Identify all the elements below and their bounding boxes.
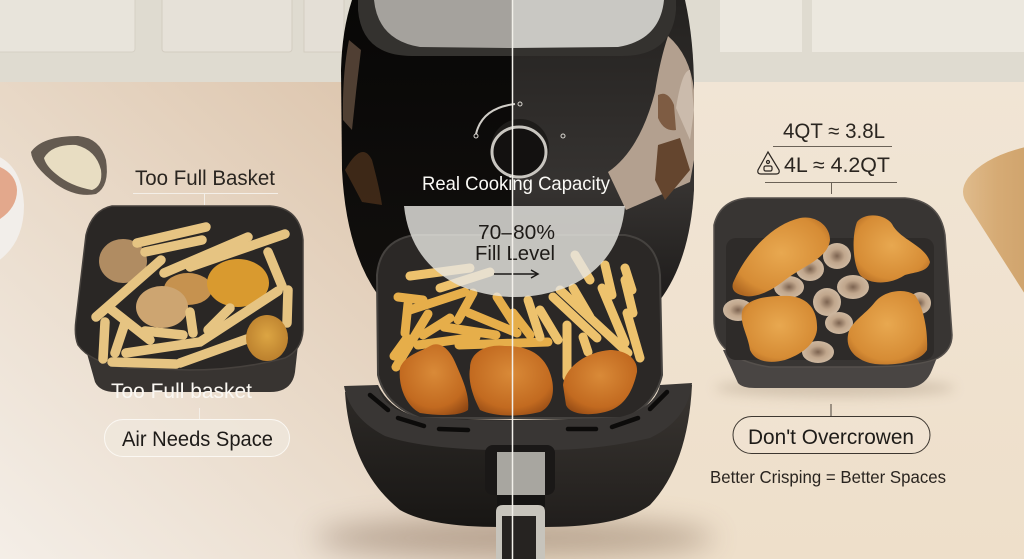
body reflections — [343, 36, 694, 210]
basket: overfilled — [75, 206, 303, 392]
pill: air needs space: Air Needs Space — [122, 428, 273, 451]
capacity conversion: 4L ≈ 4.2QT — [784, 154, 890, 177]
food: fries — [96, 227, 288, 364]
food: fries in basket — [394, 255, 640, 377]
overlay: fill level semicircle: 70–80% — [478, 221, 555, 244]
lid window — [358, 0, 676, 56]
pill: don't overcrowen: Don't Overcrowen — [748, 426, 914, 449]
background: kitchen wall — [0, 0, 1024, 84]
food: nuggets — [99, 239, 269, 328]
overlay: fill level semicircle — [404, 206, 625, 297]
prop: cutting board — [963, 146, 1024, 302]
capacity conversion: 4QT ≈ 3.8L — [783, 120, 885, 143]
caption: better crisping: Better Crisping = Better Spaces — [710, 467, 946, 487]
left panel: too full basket — [75, 167, 303, 456]
drawer front — [344, 383, 692, 559]
icon: warning triangle — [758, 152, 779, 174]
food: mushrooms — [723, 243, 931, 363]
label: real cooking capacity: Real Cooking Capacity — [422, 173, 610, 195]
fryer body — [341, 0, 694, 310]
caption: too full basket: Too Full basket — [111, 380, 252, 403]
divider line — [512, 0, 514, 559]
basket interior — [377, 235, 662, 418]
pill: don't overcrowen — [733, 416, 930, 454]
prop: white bowl of food — [0, 155, 24, 263]
prop: dip bowl — [31, 136, 107, 195]
control dial — [474, 102, 565, 177]
heading: too full basket: Too Full Basket — [135, 167, 275, 190]
basket: well spaced — [714, 198, 955, 397]
right panel: correct basket — [710, 120, 955, 487]
basket grate — [726, 238, 934, 360]
overlay: fill level semicircle: Fill Level — [475, 242, 555, 265]
arrow — [494, 270, 538, 278]
center: air fryer — [341, 0, 694, 559]
drawer rim with vents — [344, 383, 692, 450]
food: fried chicken in basket — [400, 344, 637, 416]
drawer handle — [485, 445, 555, 559]
pill: air needs space — [104, 420, 290, 456]
food: top nugget — [246, 315, 288, 361]
food: fried chicken — [732, 215, 930, 364]
capacity conversion — [758, 120, 897, 194]
